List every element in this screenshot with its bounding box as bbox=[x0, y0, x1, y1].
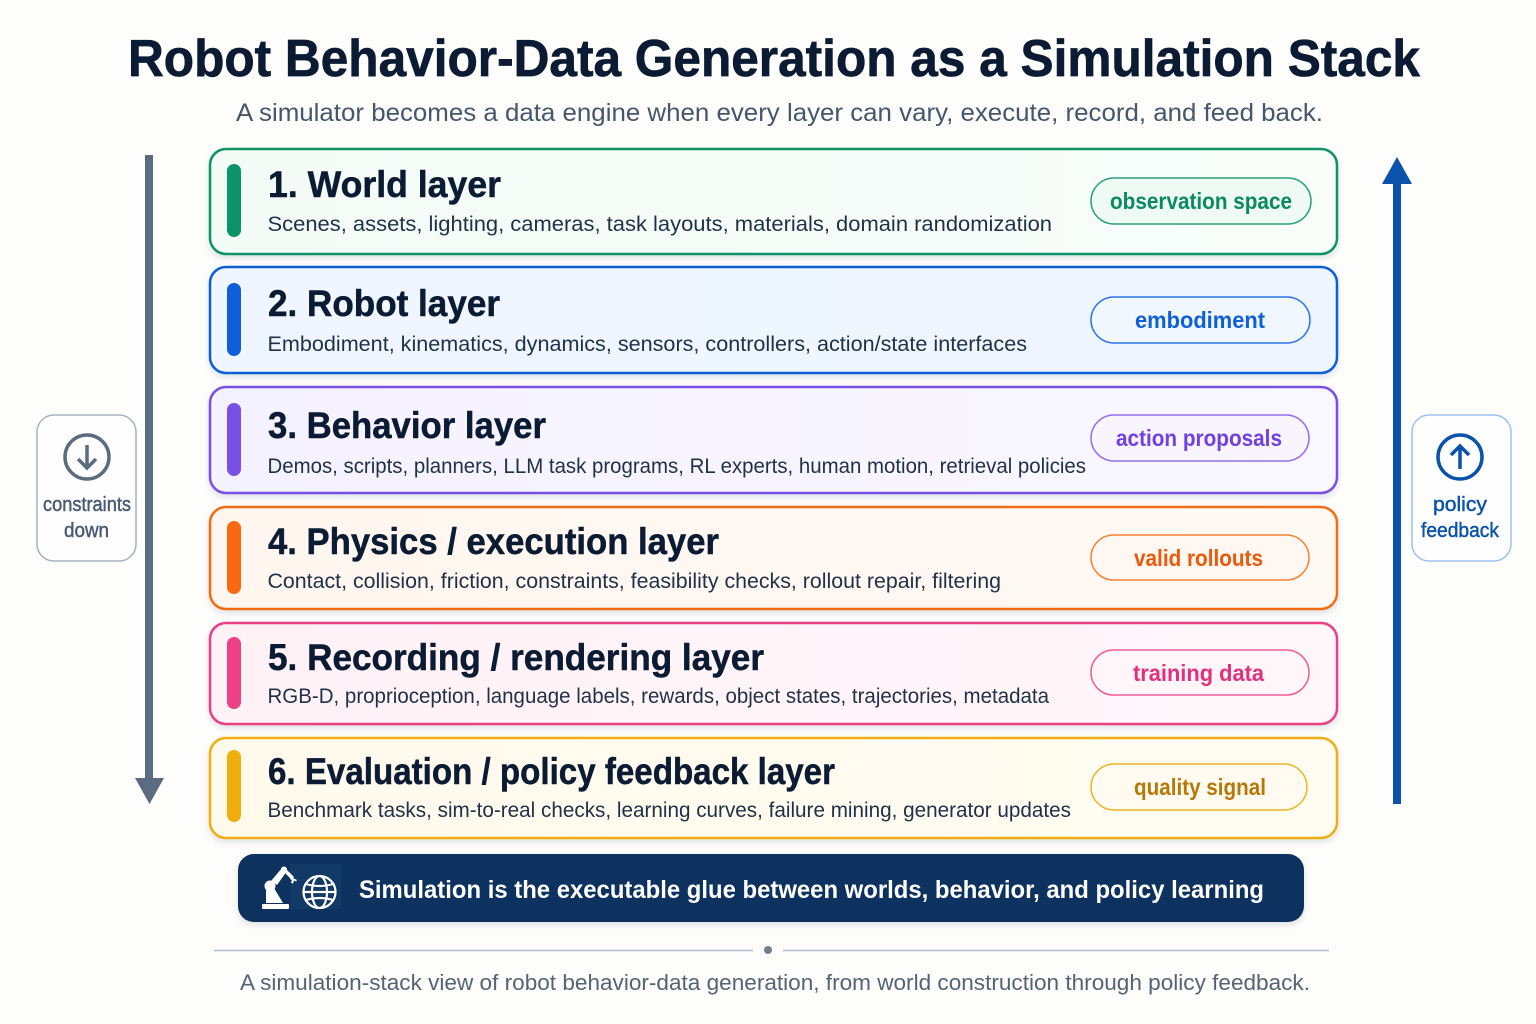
heading: robot layer: 2. Robot layer bbox=[268, 283, 500, 324]
heading: evaluation / policy feedback layer: 6. Evaluation / policy feedback layer bbox=[268, 751, 835, 792]
icon: up arrow in circle bbox=[1438, 435, 1482, 479]
banner text: Simulation is the executable glue between worlds, behavior, and policy learning bbox=[359, 876, 1264, 904]
icon: down arrow in circle bbox=[65, 435, 109, 479]
label text: constraints down bbox=[43, 494, 131, 542]
heading: world layer: 1. World layer bbox=[268, 164, 501, 205]
tag: observation space: observation space bbox=[1110, 188, 1292, 214]
arrow: policy feedback flowing up bbox=[1382, 157, 1412, 804]
label text: policy feedback bbox=[1421, 494, 1500, 542]
label text: policy feedback: feedback bbox=[1421, 520, 1500, 542]
tag: observation space bbox=[1091, 178, 1311, 224]
panel: evaluation / policy feedback layer bbox=[210, 738, 1337, 838]
tag: action proposals bbox=[1091, 415, 1309, 461]
tag: training data bbox=[1091, 650, 1309, 695]
description: recording layer: RGB-D, proprioception, language labels, rewards, object states, trajectories, metadata bbox=[268, 685, 1049, 708]
tag: embodiment bbox=[1091, 297, 1310, 343]
description: world layer: Scenes, assets, lighting, cameras, task layouts, materials, domain randomization bbox=[268, 213, 1052, 236]
heading: physics / execution layer: 4. Physics / execution layer bbox=[268, 521, 719, 562]
accent bar: recording bbox=[227, 637, 241, 709]
heading: behavior layer: 3. Behavior layer bbox=[268, 405, 546, 446]
tag: training data: training data bbox=[1133, 660, 1264, 686]
tag: quality signal: quality signal bbox=[1134, 774, 1266, 800]
label text: constraints down: constraints bbox=[43, 494, 131, 516]
arrow: constraints flowing down bbox=[135, 155, 164, 804]
description: physics layer: Contact, collision, friction, constraints, feasibility checks, rollout repair, filtering bbox=[268, 570, 1001, 593]
side label: constraints down bbox=[37, 415, 136, 561]
title: Robot Behavior-Data Generation as a Simulation Stack bbox=[128, 30, 1420, 88]
banner: key takeaway bbox=[238, 854, 1304, 922]
panel: world layer bbox=[210, 149, 1337, 254]
icon: robot arm and globe bbox=[262, 864, 341, 909]
description: behavior layer: Demos, scripts, planners, LLM task programs, RL experts, human motion, retrieval policies bbox=[268, 455, 1086, 478]
tag: valid rollouts: valid rollouts bbox=[1134, 545, 1263, 571]
accent bar: robot bbox=[227, 283, 241, 356]
accent bar: behavior bbox=[227, 403, 241, 476]
panel: behavior layer bbox=[210, 387, 1337, 493]
tag: quality signal bbox=[1091, 764, 1307, 810]
subtitle: A simulator becomes a data engine when every layer can vary, execute, record, and feed back. bbox=[236, 99, 1323, 127]
accent bar: evaluation bbox=[227, 750, 241, 822]
accent bar: world bbox=[227, 164, 241, 237]
panel: physics / execution layer bbox=[210, 507, 1337, 609]
tag: valid rollouts bbox=[1091, 535, 1309, 580]
accent bar: physics bbox=[227, 521, 241, 594]
heading: recording / rendering layer: 5. Recording / rendering layer bbox=[268, 637, 764, 678]
panel: robot layer bbox=[210, 267, 1337, 373]
side label: policy feedback bbox=[1412, 415, 1511, 561]
label text: policy feedback: policy bbox=[1433, 494, 1487, 516]
description: robot layer: Embodiment, kinematics, dynamics, sensors, controllers, action/state interfaces bbox=[268, 333, 1027, 356]
label text: constraints down: down bbox=[64, 520, 109, 542]
description: evaluation layer: Benchmark tasks, sim-to-real checks, learning curves, failure mining, generator updates bbox=[268, 799, 1071, 822]
tag: embodiment: embodiment bbox=[1135, 307, 1265, 333]
panel: recording / rendering layer bbox=[210, 623, 1337, 724]
tag: action proposals: action proposals bbox=[1116, 425, 1282, 451]
caption: A simulation-stack view of robot behavior-data generation, from world construction through policy feedback. bbox=[240, 970, 1310, 995]
